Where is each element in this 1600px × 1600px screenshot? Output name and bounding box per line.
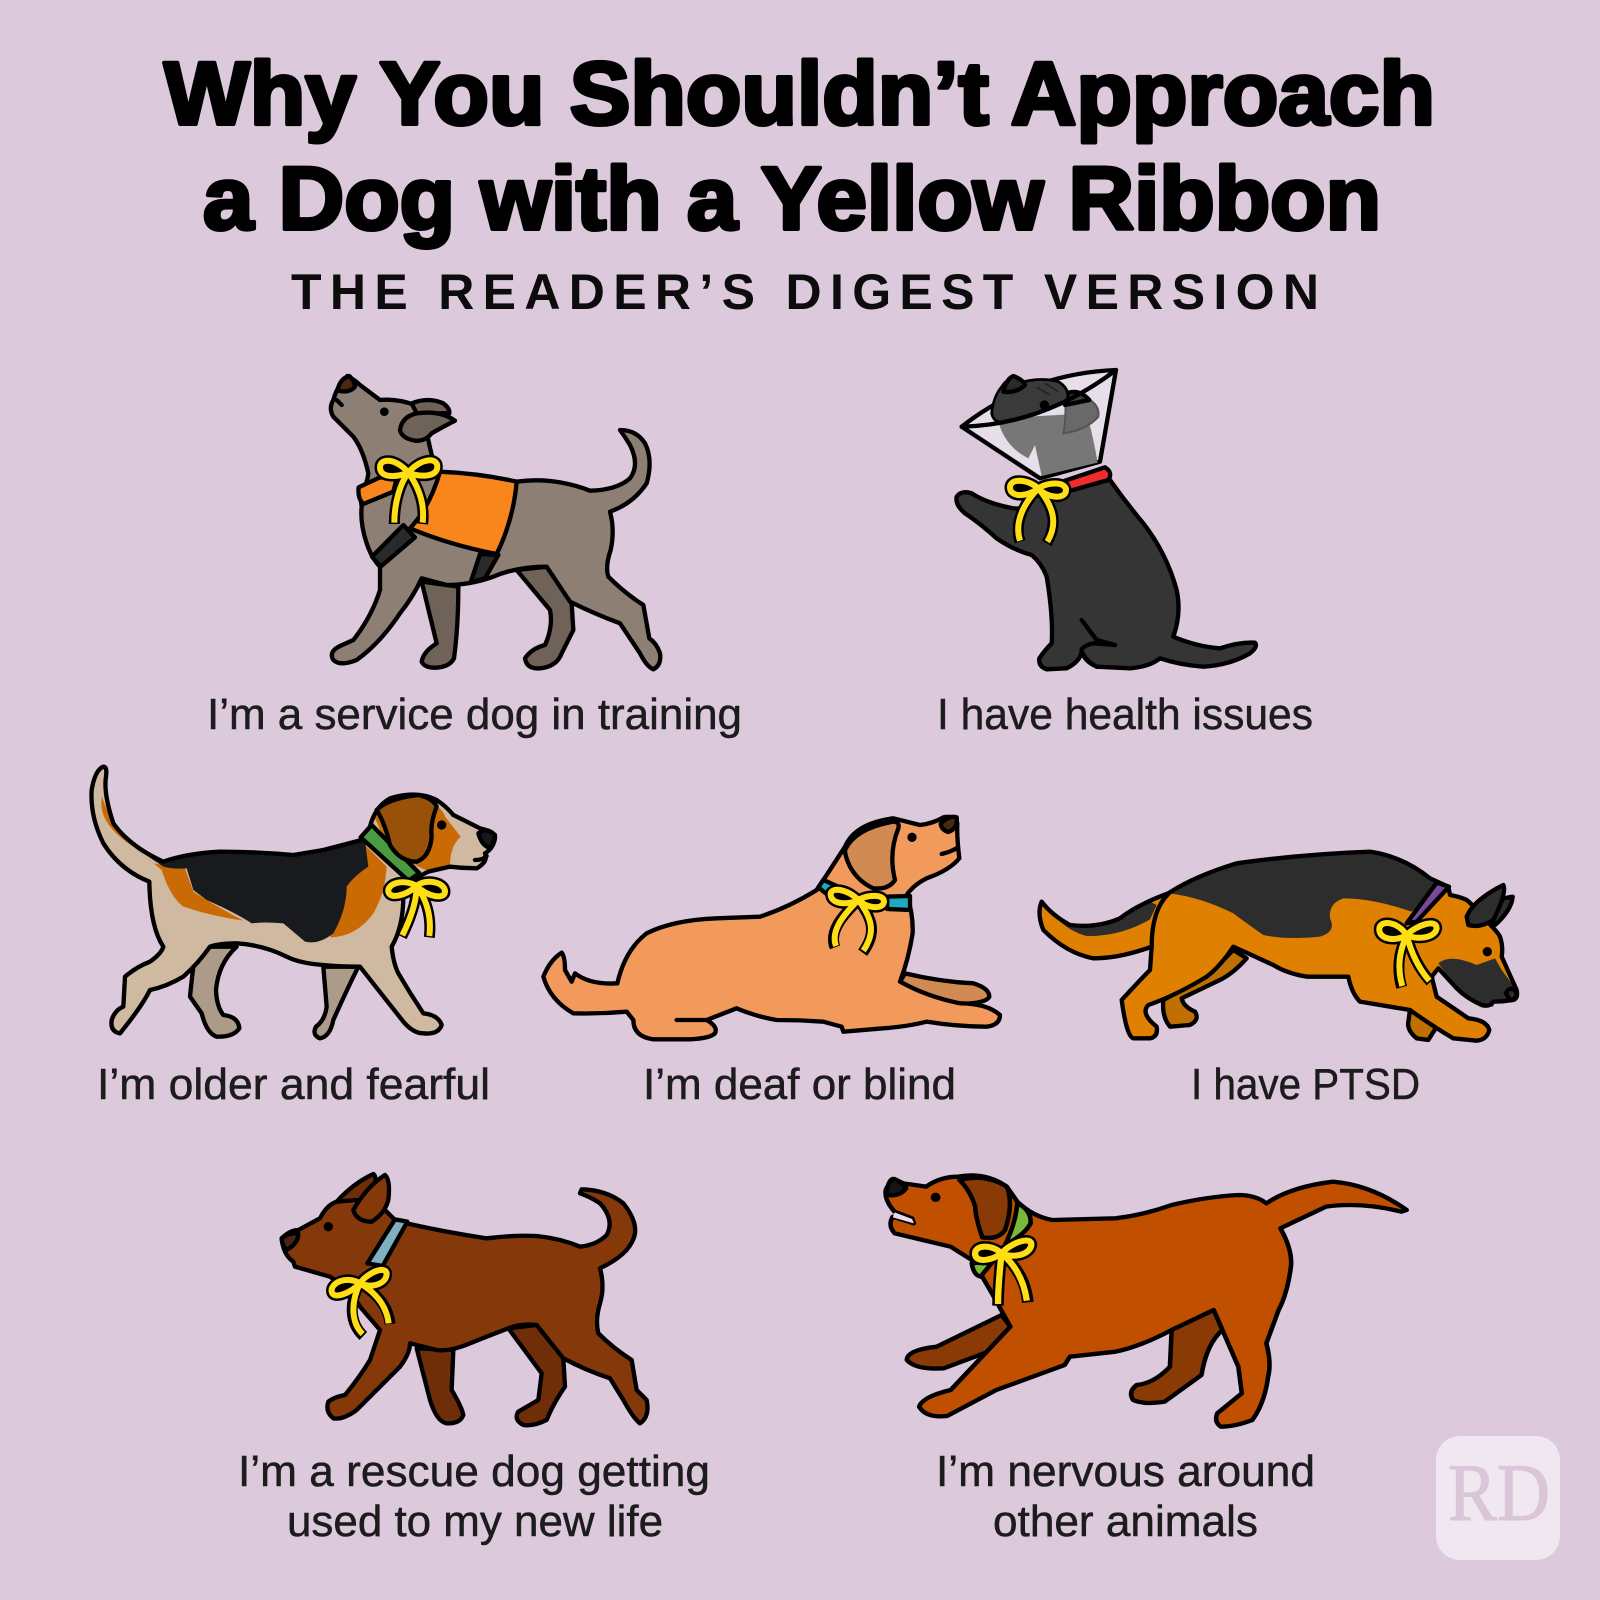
dog: deaf or blind, lying down xyxy=(543,817,1000,1039)
markings xyxy=(101,797,243,921)
face xyxy=(375,797,461,871)
title: a Dog with a Yellow Ribbon xyxy=(203,148,1381,248)
caption: rescue dog xyxy=(238,1447,710,1546)
ribbon xyxy=(332,1270,390,1336)
caption: rescue dog: used to my new life xyxy=(287,1497,663,1546)
dog: service dog in training xyxy=(331,376,660,669)
logo: RD xyxy=(1436,1436,1560,1560)
collar xyxy=(1065,467,1110,491)
caption: health issues: I have health issues xyxy=(937,690,1313,739)
dog: german shepherd, PTSD xyxy=(1040,852,1517,1041)
title xyxy=(164,43,1435,248)
ribbon xyxy=(380,460,437,524)
caption: rescue dog: I’m a rescue dog getting xyxy=(238,1447,710,1496)
caption: nervous: other animals xyxy=(993,1497,1258,1546)
dog: cone, health issues xyxy=(956,370,1256,669)
caption: service dog: I’m a service dog in training xyxy=(207,690,742,739)
ribbon xyxy=(831,890,884,953)
title: Why You Shouldn’t Approach xyxy=(164,43,1435,143)
caption: deaf or blind: I’m deaf or blind xyxy=(643,1060,956,1109)
ribbon xyxy=(975,1240,1031,1306)
dog: beagle, older and fearful xyxy=(91,767,495,1038)
ribbon xyxy=(388,882,445,937)
caption: older and fearful: I’m older and fearful xyxy=(97,1060,490,1109)
ribbon xyxy=(1010,481,1066,543)
caption: nervous xyxy=(936,1447,1315,1546)
ribbon xyxy=(1379,923,1437,987)
dog: nervous around other animals xyxy=(886,1175,1407,1427)
subtitle: THE READER’S DIGEST VERSION xyxy=(291,264,1319,320)
cone xyxy=(962,370,1116,478)
markings xyxy=(1168,852,1443,938)
collar xyxy=(972,1203,1031,1277)
caption: nervous: I’m nervous around xyxy=(936,1447,1315,1496)
collar xyxy=(1407,883,1449,923)
caption: PTSD: I have PTSD xyxy=(1191,1060,1420,1109)
dog: rescue dog xyxy=(282,1174,647,1425)
collar xyxy=(367,1219,407,1266)
collar xyxy=(818,880,910,910)
logo: RD: RD xyxy=(1448,1447,1550,1538)
